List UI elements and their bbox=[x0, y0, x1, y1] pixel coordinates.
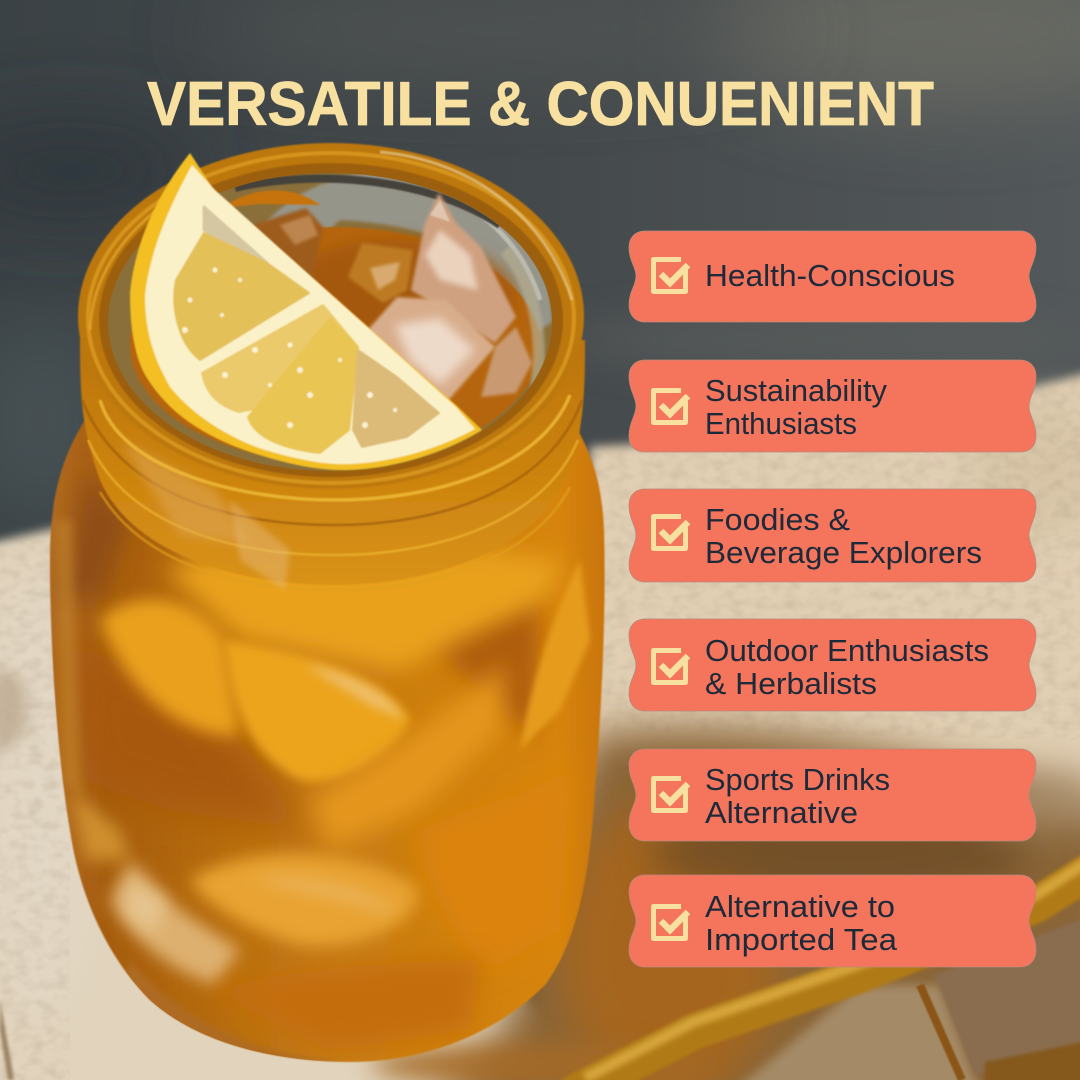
item: Sports Drinks Alternative: Alternative bbox=[705, 795, 858, 830]
item: Alternative to Imported Tea: Imported Tea bbox=[705, 922, 898, 957]
tea surface bbox=[130, 227, 540, 463]
lemon slices and ice inside the tea bbox=[55, 470, 590, 1070]
item: Alternative to Imported Tea: Alternative to bbox=[705, 889, 895, 924]
jar shadow on cloth bbox=[420, 728, 1080, 1080]
item: Sustainability Enthusiasts: Sustainability bbox=[705, 373, 887, 408]
item: Outdoor Enthusiasts & Herbalists: Outdoor Enthusiasts bbox=[705, 633, 989, 668]
audience list bbox=[629, 231, 1036, 967]
lemon rind bbox=[130, 153, 482, 470]
cinnamon stick bbox=[570, 868, 1080, 1080]
brown ice cubes bbox=[246, 208, 323, 277]
item: Foodies & Beverage Explorers: Foodies & bbox=[705, 502, 850, 537]
item: Sports Drinks Alternative bbox=[629, 749, 1036, 841]
item: Sustainability Enthusiasts bbox=[629, 360, 1036, 452]
jar with iced tea bbox=[50, 143, 605, 1070]
lemon wedge bbox=[130, 153, 482, 470]
item: Health-Conscious bbox=[629, 231, 1036, 322]
jar neck and thread rings bbox=[80, 340, 585, 585]
lemon pith bbox=[145, 165, 475, 464]
item: Foodies & Beverage Explorers: Beverage Explorers bbox=[705, 535, 982, 570]
lemon segments bbox=[204, 207, 267, 263]
cloth left and front bbox=[0, 525, 620, 1080]
cloth weave texture bbox=[0, 382, 1080, 1080]
jar body bbox=[50, 420, 605, 1062]
title: VERSATILE & CONUENIENT bbox=[147, 70, 934, 139]
jar rim glass bbox=[78, 143, 584, 489]
item: Sports Drinks Alternative: Sports Drinks bbox=[705, 762, 890, 797]
item: Outdoor Enthusiasts & Herbalists bbox=[629, 619, 1036, 711]
pale ice cubes bbox=[411, 193, 516, 343]
item: Sustainability Enthusiasts: Enthusiasts bbox=[705, 406, 857, 441]
wooden slat bbox=[920, 985, 962, 1080]
item: Health-Conscious: Health-Conscious bbox=[705, 258, 955, 293]
item: Foodies & Beverage Explorers bbox=[629, 489, 1036, 582]
item: Outdoor Enthusiasts & Herbalists: & Herbalists bbox=[705, 666, 877, 701]
juice highlights bbox=[182, 268, 397, 428]
cloth right bbox=[590, 365, 1080, 1080]
jar mouth interior bbox=[108, 173, 552, 471]
item: Alternative to Imported Tea bbox=[629, 875, 1036, 967]
